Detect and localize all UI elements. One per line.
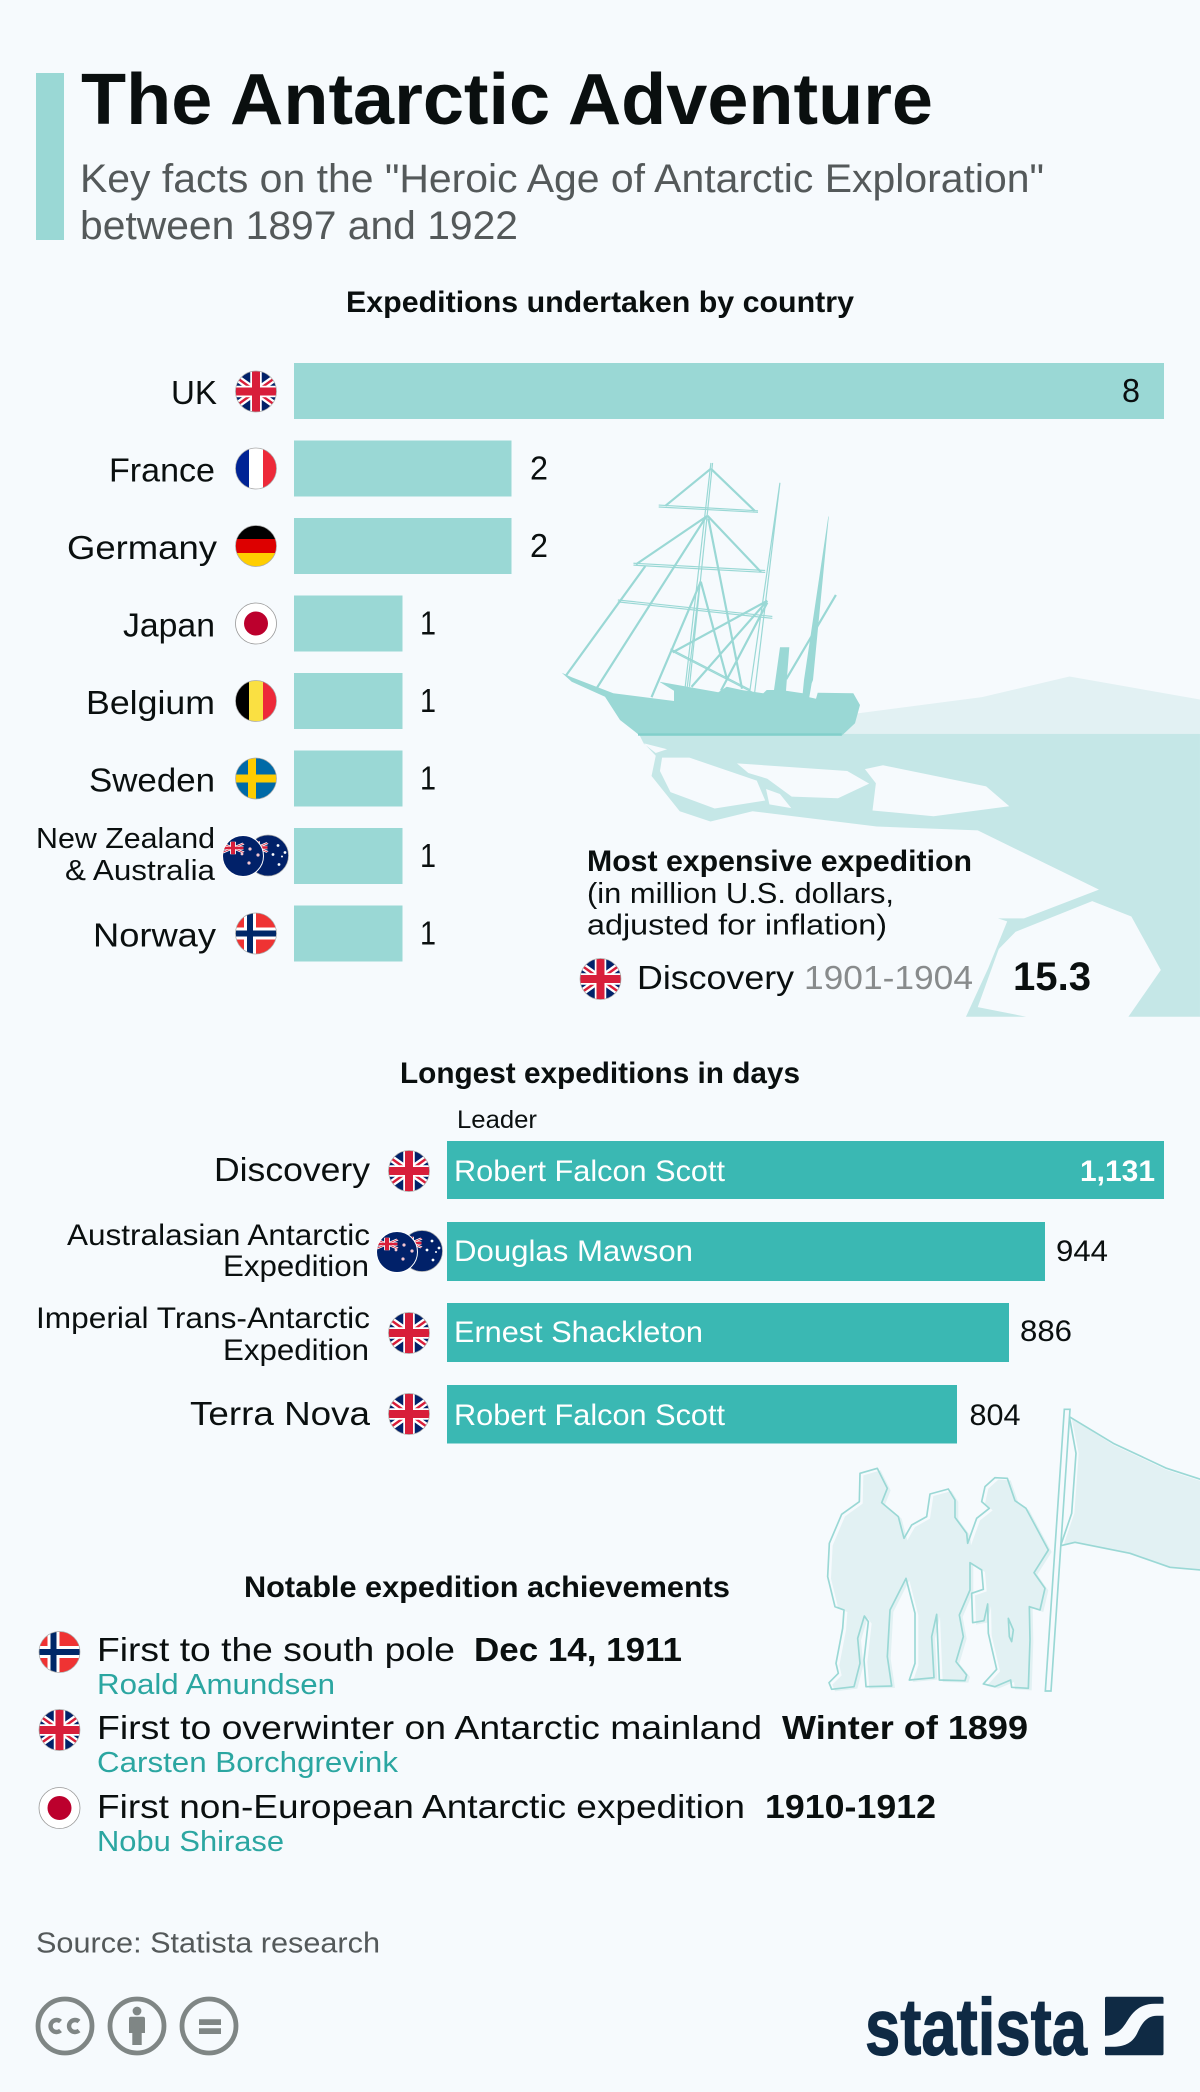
achievement: overwinter: Carsten Borchgrevink (97, 1747, 399, 1779)
heading: expeditions: Expeditions undertaken by country (346, 286, 854, 319)
row: Imperial Trans-Antarctic Expedition: 886 (1020, 1315, 1072, 1348)
heading: notable achievements: Notable expedition achievements (244, 1571, 730, 1604)
icons: creative commons licence (38, 1999, 236, 2053)
achievement: overwinter: Winter of 1899 (782, 1709, 1028, 1746)
row: Discovery: 1,131 (1080, 1155, 1155, 1188)
row: Imperial Trans-Antarctic Expedition: Expedition (223, 1334, 369, 1367)
row: Sweden (89, 750, 436, 806)
waterline (638, 733, 842, 736)
achievement: non-European: First non-European Antarctic expedition (97, 1788, 745, 1825)
row: France: 2 (530, 450, 548, 486)
row: France: France (109, 452, 215, 488)
illustration: explorers with flag (828, 1409, 1200, 1691)
callout: most expensive expedition (580, 845, 1091, 1000)
callout: most expensive expedition: 15.3 (1013, 955, 1091, 999)
row: Norway (93, 906, 436, 962)
achievement: non-European (39, 1788, 936, 1858)
row: New Zealand and Australia: 1 (420, 837, 436, 874)
row: Imperial Trans-Antarctic Expedition: Imperial Trans-Antarctic (36, 1302, 370, 1335)
row: UK (171, 363, 1164, 419)
achievement: south pole: First to the south pole (97, 1631, 455, 1668)
flag cloth outline (1061, 1417, 1200, 1570)
ship hull (562, 516, 860, 736)
icon: cc (38, 1999, 92, 2053)
column label: leader: Leader (457, 1106, 537, 1134)
row: Imperial Trans-Antarctic Expedition: Ernest Shackleton (454, 1316, 703, 1349)
callout: most expensive expedition: Most expensive expedition (587, 845, 972, 878)
title: The Antarctic Adventure (81, 60, 933, 140)
row: Terra Nova: Robert Falcon Scott (454, 1399, 726, 1432)
achievement: overwinter: First to overwinter on Antarctic mainland (97, 1709, 762, 1746)
row: New Zealand and Australia: New Zealand (36, 823, 215, 855)
row: Belgium (86, 673, 436, 729)
icon: no derivatives (182, 1999, 236, 2053)
callout: most expensive expedition: 1901-1904 (804, 959, 973, 996)
row: Japan: Japan (123, 606, 215, 644)
flag pole (1045, 1409, 1070, 1691)
silhouette fill (831, 1470, 1052, 1691)
callout: most expensive expedition: adjusted for inflation) (587, 910, 887, 942)
callout: most expensive expedition: Discovery (637, 959, 795, 996)
subtitle: between 1897 and 1922 (80, 204, 518, 248)
row: New Zealand and Australia: & Australia (65, 855, 216, 887)
row: Imperial Trans-Antarctic Expedition (36, 1302, 1072, 1367)
achievement: south pole: Dec 14, 1911 (474, 1631, 682, 1668)
row: Belgium: 1 (420, 682, 436, 719)
row: New Zealand and Australia (36, 823, 436, 887)
row: Japan: 1 (420, 604, 436, 642)
row: Norway: 1 (420, 914, 436, 952)
ship rigging (566, 463, 836, 697)
bar chart: longest expeditions (36, 1141, 1164, 1444)
achievement: non-European: Nobu Shirase (97, 1826, 284, 1858)
row: Terra Nova: Terra Nova (190, 1395, 371, 1432)
icon: statista mark (1105, 1997, 1164, 2055)
logo: statista: statista (865, 1982, 1087, 2072)
silhouette outline (828, 1468, 1048, 1689)
row: Terra Nova: 804 (970, 1399, 1020, 1432)
row: Sweden: 1 (420, 760, 436, 796)
ice sheet (639, 734, 1200, 1017)
row: Norway: Norway (93, 916, 217, 954)
accent bar (36, 73, 64, 240)
row: Australasian Antarctic Expedition (67, 1219, 1108, 1283)
subtitle: Key facts on the "Heroic Age of Antarctic Exploration" (80, 157, 1044, 201)
heading: longest expeditions: Longest expeditions in days (400, 1057, 800, 1090)
bar chart: expeditions by country (36, 363, 1164, 962)
achievement: south pole (38, 1631, 682, 1701)
row: Germany (67, 518, 548, 574)
flag cloth fill (1063, 1418, 1200, 1570)
row: Germany: 2 (530, 527, 548, 564)
row: Belgium: Belgium (86, 684, 215, 721)
row: UK: 8 (1122, 372, 1140, 409)
row: Discovery (214, 1141, 1164, 1199)
achievement: non-European: 1910-1912 (765, 1788, 936, 1825)
row: Australasian Antarctic Expedition: 944 (1056, 1235, 1108, 1268)
row: France (109, 440, 548, 496)
row: Australasian Antarctic Expedition: Expedition (223, 1250, 369, 1283)
row: Germany: Germany (67, 529, 218, 566)
distant iceberg (843, 677, 1200, 734)
row: UK: UK (171, 374, 217, 411)
illustration: ship on ice (562, 463, 1200, 1017)
row: Australasian Antarctic Expedition: Douglas Mawson (454, 1235, 693, 1268)
row: Japan (123, 596, 436, 652)
row: Sweden: Sweden (89, 762, 215, 798)
icon: attribution (110, 1999, 164, 2053)
subtitle (80, 157, 1044, 248)
row: Terra Nova (190, 1385, 1020, 1444)
achievement: overwinter (38, 1709, 1028, 1779)
row: Discovery: Discovery (214, 1151, 371, 1188)
achievement: south pole: Roald Amundsen (97, 1669, 335, 1701)
callout: most expensive expedition: (in million U.S. dollars, (587, 878, 894, 910)
source: Source: Statista research (36, 1928, 380, 1960)
row: Australasian Antarctic Expedition: Australasian Antarctic (67, 1219, 370, 1252)
row: Discovery: Robert Falcon Scott (454, 1155, 726, 1188)
